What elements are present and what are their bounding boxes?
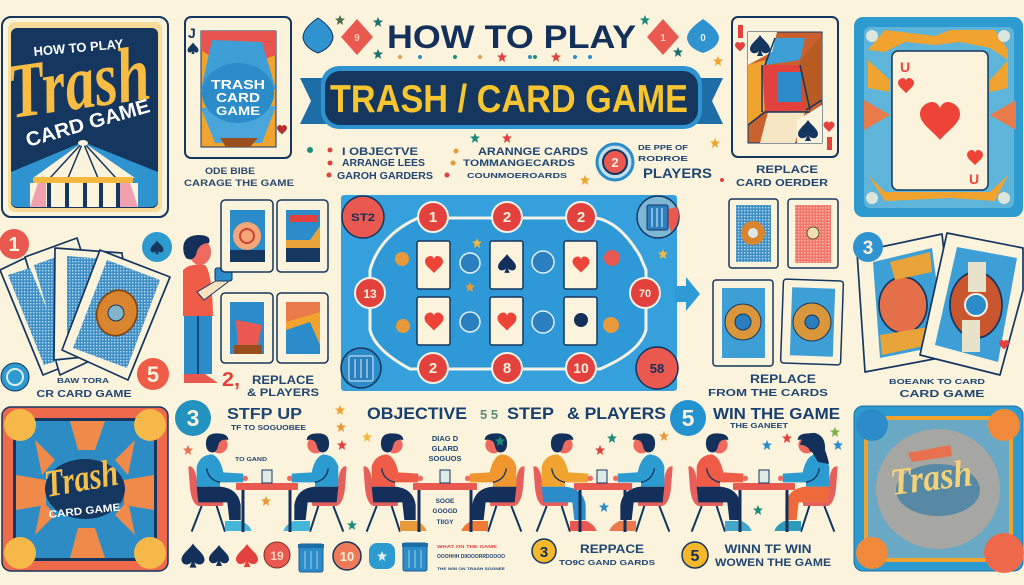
numbered markers xyxy=(355,202,660,383)
game board: 1 xyxy=(429,209,437,226)
decorative title badges xyxy=(303,18,719,55)
banner text: TRASH / CARD GAME xyxy=(330,78,688,121)
icon: red chip xyxy=(264,542,290,568)
scene 1: players at table xyxy=(188,433,347,532)
card: small picture top right xyxy=(277,200,328,272)
icon: black spade xyxy=(182,544,204,568)
badge: step 5 win: 5 xyxy=(682,405,695,431)
badge: step 1: 1 xyxy=(8,234,20,256)
caption: draw a card: CR CARD GAME xyxy=(36,388,132,400)
caption: replace: REPPACE xyxy=(580,542,644,556)
scene text upper: GLARD xyxy=(432,444,459,453)
caption: replace from the cards: FROM THE CARDS xyxy=(708,387,828,399)
caption: replace card order xyxy=(736,164,829,189)
badge: step 3: 3 xyxy=(863,238,873,259)
caption: replace and players: REPLACE xyxy=(252,375,314,387)
table track xyxy=(370,218,646,369)
heading: objective step players xyxy=(367,405,666,423)
text block: players: RODROE xyxy=(638,154,688,163)
game board: 70 xyxy=(639,288,651,300)
panel: trash game box blue xyxy=(854,406,1024,573)
caption: card game: BOEANK TO CARD xyxy=(889,377,986,386)
banner: trash card game xyxy=(300,66,723,129)
game board: 2 xyxy=(503,209,511,226)
heading: win the game: WIN THE GAME xyxy=(713,406,840,423)
card: small picture top left xyxy=(221,200,273,272)
caption: draw a card: BAW TORA xyxy=(57,376,110,385)
icon: two players badge xyxy=(597,144,633,180)
icon: coin xyxy=(1,363,29,391)
panel: ace of hearts with ornate frame: U xyxy=(969,171,979,187)
heading: objective step players: OBJECTIVE xyxy=(367,405,467,423)
game board: 8 xyxy=(503,360,511,377)
caption: replace and players: 2, xyxy=(222,369,240,391)
heading: trash: Trash xyxy=(2,29,155,135)
trash marker bottom left xyxy=(341,348,381,388)
text block: objective: ARRANGE LEES xyxy=(342,157,425,169)
scene 4: players at table xyxy=(688,433,838,532)
scene 1: players at table: TO GAND xyxy=(235,457,267,463)
box title: Trash xyxy=(41,452,121,506)
small card pattern left xyxy=(713,280,773,366)
badge: yellow 5: 5 xyxy=(691,548,700,565)
caption: win the game: WINN TF WIN xyxy=(724,542,812,556)
scene 2: players at table xyxy=(363,433,525,532)
text block: players xyxy=(638,143,712,181)
fine print xyxy=(437,544,505,571)
text block: objective xyxy=(337,146,433,182)
heading: how to play: HOW TO PLAY xyxy=(33,36,124,59)
icon: trash can second xyxy=(402,543,428,571)
badge: step 5 xyxy=(137,358,169,390)
text block: arrange cards: TOMMANGECARDS xyxy=(463,158,575,169)
small card red back xyxy=(788,199,838,268)
caption: replace and players xyxy=(222,369,319,399)
caption: arrange the game xyxy=(184,166,294,189)
caption: replace from the cards xyxy=(708,374,828,399)
text block: arrange cards xyxy=(463,146,588,180)
scene text upper: DIAG D xyxy=(432,434,459,443)
badge: yellow 3: 3 xyxy=(540,544,548,561)
heading: objective step players: 5 5 xyxy=(480,407,498,422)
icon: navy spade xyxy=(209,545,229,566)
game board xyxy=(341,195,679,391)
cards: overlapping pair xyxy=(857,233,1023,375)
person holding cards xyxy=(183,235,232,383)
card: replace card order xyxy=(732,17,838,157)
caption: replace card order: REPLACE xyxy=(756,164,818,176)
game board: 2 xyxy=(577,209,585,226)
title: how to play: HOW TO PLAY xyxy=(387,19,636,55)
game board: 2 xyxy=(429,360,437,377)
caption: card game: CARD GAME xyxy=(900,388,984,400)
trash marker top right xyxy=(637,196,679,238)
subheading: the game: THE GANEET xyxy=(730,423,789,430)
fine print: OOOHHH DIIOOORRDOOOO xyxy=(437,554,505,560)
icon: chip 10: 10 xyxy=(340,549,354,564)
caption: replace card order: CARD OERDER xyxy=(736,178,829,189)
medallion xyxy=(90,285,144,341)
caption: replace and players: & PLAYERS xyxy=(247,387,319,399)
cards: replace from the cards xyxy=(713,199,843,366)
corner marker st2: ST2 xyxy=(351,212,375,224)
small card blue back xyxy=(729,199,778,268)
scene text upper xyxy=(429,434,461,463)
panel: trash game box red: CARD GAME xyxy=(48,502,121,521)
heading: objective step players: STEP xyxy=(507,405,554,423)
badge: step 1 xyxy=(0,229,29,259)
fine print: THE WIN ON TRASH SOGNEE xyxy=(437,566,505,571)
scene text lower xyxy=(433,498,458,526)
heading: objective step players: & PLAYERS xyxy=(567,405,666,423)
game board: 10 xyxy=(573,360,589,376)
cards: draw fan xyxy=(0,238,170,380)
card title: TRASH xyxy=(211,77,265,92)
scene text lower: SOOE xyxy=(436,498,455,505)
decorative title badges: 9 xyxy=(354,33,360,44)
text block: players: DE PPE OF xyxy=(638,143,689,152)
corner marker st2 xyxy=(342,196,384,238)
panel: how to play cover card xyxy=(2,17,168,217)
decorative title badges: 1 xyxy=(660,33,666,44)
card: trash card game jack: GAME xyxy=(216,104,260,118)
card: small picture bottom right xyxy=(277,293,328,363)
corner marker 58 xyxy=(636,347,678,389)
heading: step up: STFP UP xyxy=(227,406,302,423)
card: trash card game jack: CARD xyxy=(216,90,260,105)
icon: chip 10 xyxy=(333,542,361,570)
illustration: circus tent xyxy=(11,140,158,207)
badge: step 5: 5 xyxy=(147,362,159,387)
heading: card game: CARD GAME xyxy=(23,95,152,152)
text block: arrange cards: COUNMOEROARDS xyxy=(467,171,567,180)
text block: arrange cards: ARANNGE CARDS xyxy=(478,146,588,158)
panel: ace of hearts with ornate frame: U xyxy=(900,59,910,75)
text block: objective: I OBJECTVE xyxy=(342,146,418,158)
panel: ace of hearts with ornate frame xyxy=(854,17,1023,217)
game board: 13 xyxy=(363,287,377,301)
scene text lower: GOOGD xyxy=(433,508,458,515)
text block: players: PLAYERS xyxy=(643,165,712,181)
scattered icons between scenes xyxy=(183,405,843,530)
caption: replace from the cards: REPLACE xyxy=(750,374,816,386)
card: small picture bottom left xyxy=(221,293,273,363)
cards xyxy=(417,241,597,345)
icon: two players badge: 2 xyxy=(611,155,619,170)
scene text upper: SOGUOS xyxy=(429,454,461,463)
caption: arrange the game: ODE BIBE xyxy=(205,166,255,176)
panel: trash game box red xyxy=(2,407,168,571)
badge: step 3 setup: 3 xyxy=(187,405,199,431)
badge: step 3 xyxy=(853,232,883,262)
decorative confetti row xyxy=(307,15,724,185)
caption: win the game xyxy=(715,542,831,569)
card: trash card game jack xyxy=(185,17,291,158)
card: trash card game jack: J xyxy=(188,25,196,41)
arrow xyxy=(675,277,700,311)
caption: replace: TO9C GAND GARDS xyxy=(559,558,655,567)
box title: Trash xyxy=(888,452,974,504)
subheading: step up: TF TO SOGUOBEE xyxy=(231,425,306,432)
icon: red spade xyxy=(236,544,258,567)
badge: yellow 3 xyxy=(532,539,556,563)
decorative title badges: 0 xyxy=(700,33,706,44)
icon: trash can xyxy=(298,544,324,572)
icon: red chip: 19 xyxy=(270,549,284,563)
caption: draw a card xyxy=(36,376,132,400)
fine print: WHAT ON THE GAME xyxy=(437,544,497,549)
caption: replace xyxy=(559,542,655,567)
text block: objective: GAROH GARDERS xyxy=(337,171,433,182)
scene text lower: TIIGY xyxy=(437,519,454,526)
corner marker 58: 58 xyxy=(650,361,664,376)
badge: yellow 5 xyxy=(682,542,708,568)
icon: club badge xyxy=(142,232,172,262)
scene 3: players at table xyxy=(533,433,673,532)
badge: step 3 setup xyxy=(175,400,211,436)
caption: card game xyxy=(889,377,986,400)
badge: step 5 win xyxy=(670,400,706,436)
chips xyxy=(460,251,554,333)
small card pattern right xyxy=(781,279,843,365)
caption: win the game: WOWEN THE GAME xyxy=(715,557,831,569)
caption: arrange the game: CARAGE THE GAME xyxy=(184,178,294,189)
icon: blue tile xyxy=(369,543,395,569)
